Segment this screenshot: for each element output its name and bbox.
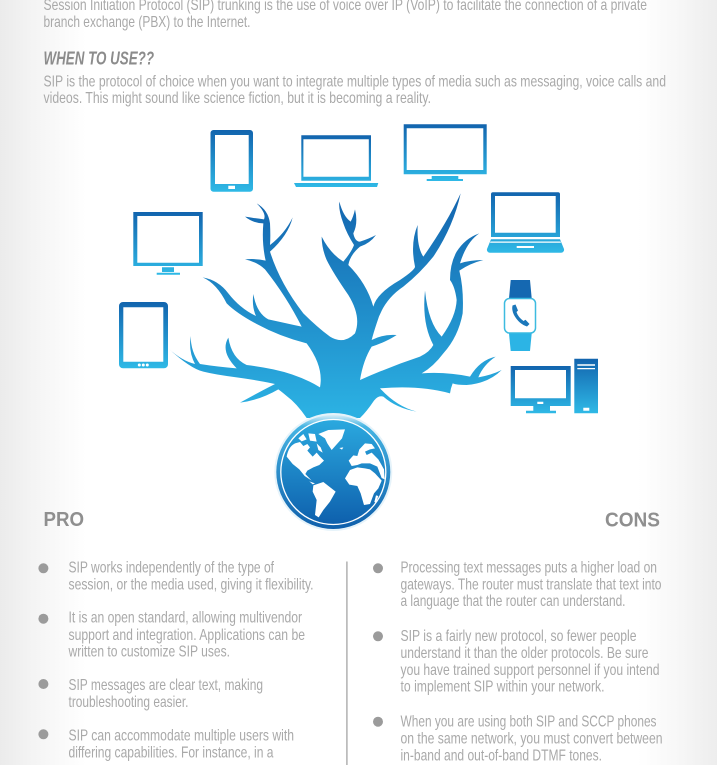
con item 2: SIP is a fairly new protocol, so fewer people [400, 628, 637, 645]
con item 3: in-band and out-of-band DTMF tones. [400, 747, 602, 764]
con item 1: a language that the router can understand. [400, 593, 626, 610]
globe [274, 413, 392, 531]
pro item 2: support and integration. Applications can be [68, 627, 305, 644]
heading: cons: CONS [605, 510, 660, 532]
pro item 1: SIP works independently of the type of [68, 559, 274, 576]
pro item 2 [38, 610, 305, 661]
pro item 3: troubleshooting easier. [68, 694, 188, 711]
intro text block: branch exchange (PBX) to the Internet. [44, 14, 250, 31]
when to use text block: videos. This might sound like science fiction, but it is becoming a reality. [44, 90, 431, 107]
con item 2 [373, 628, 660, 696]
pro item 1 [38, 559, 314, 593]
icon: tablet left [119, 302, 168, 368]
icon: laptop top [294, 135, 378, 187]
pro item 3: SIP messages are clear text, making [68, 677, 263, 694]
icon: desktop computer [511, 359, 598, 413]
con item 2: to implement SIP within your network. [400, 679, 604, 696]
pro item 2: It is an open standard, allowing multivendor [68, 610, 303, 627]
panel: pros list [38, 559, 314, 762]
tree of branches [168, 193, 502, 418]
pro item 3 [38, 677, 263, 711]
pro item 2: written to customize SIP uses. [68, 644, 230, 661]
pro item 4: differing capabilities. For instance, in a [68, 745, 274, 762]
intro text block [44, 0, 647, 31]
icon: smartwatch [504, 280, 536, 351]
icon: laptop right [487, 192, 564, 253]
icon: monitor left [133, 212, 203, 275]
icon: monitor top right [404, 124, 487, 181]
heading: pro: PRO [44, 509, 84, 531]
con item 1 [373, 559, 662, 610]
pro item 4: SIP can accommodate multiple users with [68, 728, 294, 745]
panel: cons list [373, 559, 662, 764]
pro item 1: session, or the media used, giving it flexibility. [68, 576, 314, 593]
pro item 4 [38, 728, 294, 762]
column divider [346, 562, 348, 765]
heading: when to use: WHEN TO USE?? [44, 48, 154, 68]
con item 3 [373, 714, 662, 764]
when to use text block [44, 74, 666, 107]
icon: tablet top [210, 130, 253, 192]
